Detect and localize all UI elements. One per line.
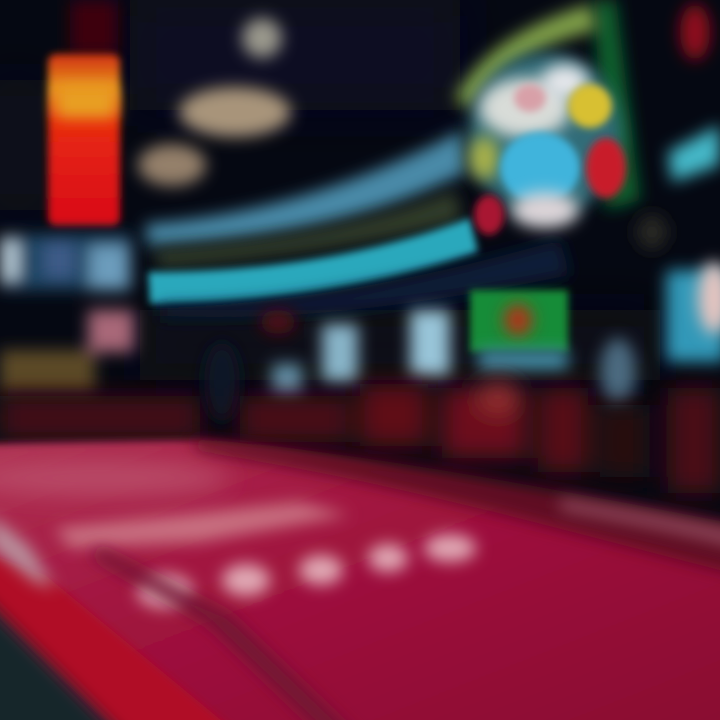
rail highlight	[560, 498, 720, 548]
table rail	[190, 438, 720, 575]
lower teal curved band	[148, 218, 478, 304]
olive middle band	[155, 190, 462, 268]
right side signs	[636, 4, 720, 362]
upper blue curved band	[145, 130, 466, 246]
pale felt area	[0, 460, 230, 496]
wall tint	[0, 0, 660, 380]
green screen	[470, 290, 568, 370]
red illuminated tower	[48, 0, 120, 226]
colourful wheel sign	[455, 0, 640, 235]
left blue panels	[0, 234, 134, 392]
light blue wall panels	[204, 310, 636, 422]
row of red seats	[0, 380, 720, 493]
faint felt line	[90, 548, 360, 720]
dark blue strip under band	[160, 240, 570, 318]
ceiling lamps	[138, 18, 291, 186]
white betting marks	[137, 534, 476, 608]
felt lettering glow	[55, 502, 350, 548]
front left table edge	[0, 515, 245, 720]
casino table felt	[0, 438, 720, 720]
